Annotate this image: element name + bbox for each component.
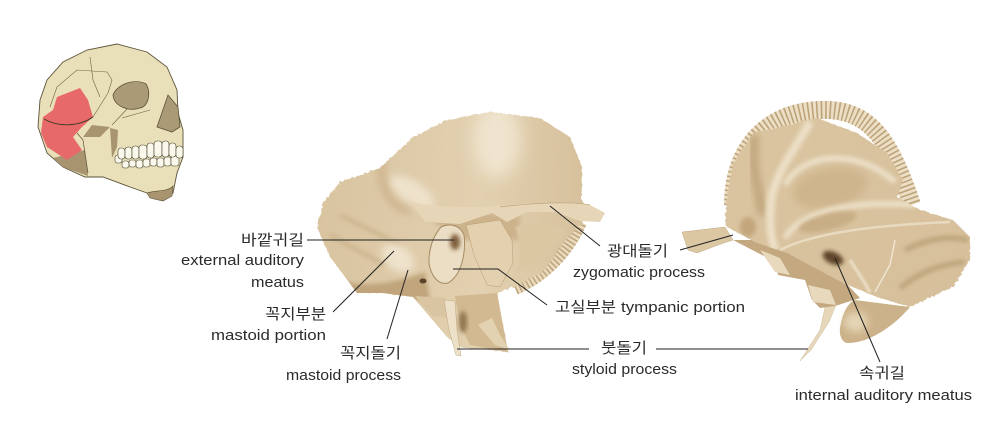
label: styloid process xyxy=(572,340,677,378)
label: styloid process: styloid process xyxy=(572,361,677,378)
skull: highlighted temporal region xyxy=(41,88,93,160)
skull: eye socket xyxy=(113,82,149,109)
label: external auditory meatus: 바깥귀길 xyxy=(241,232,304,249)
lateral bone: petrous apex xyxy=(455,293,508,352)
label: mastoid portion xyxy=(211,306,326,344)
label: internal auditory meatus: internal auditory meatus xyxy=(795,387,972,404)
label: tympanic portion xyxy=(555,299,745,316)
lateral bone: main body xyxy=(317,112,590,352)
label: tympanic portion: 고실부분 xyxy=(555,299,616,316)
label: mastoid process: 꼭지돌기 xyxy=(340,345,401,362)
skull: cheek opening xyxy=(83,125,110,137)
medial bone: styloid process xyxy=(800,303,836,361)
lateral bone: zygomatic process xyxy=(410,202,605,224)
icon: skull with temporal bone highlighted xyxy=(38,44,183,201)
illustration: lateral view of temporal bone xyxy=(317,102,605,356)
label: mastoid portion: 꼭지부분 xyxy=(265,306,326,323)
medial bone: zygomatic process xyxy=(682,227,733,253)
medial bone: mastoid bulge xyxy=(840,300,910,343)
label: external auditory meatus: meatus xyxy=(251,274,304,291)
medial bone: inner surface xyxy=(725,118,970,307)
label: zygomatic process xyxy=(573,243,705,281)
label: internal auditory meatus: 속귀길 xyxy=(859,365,905,382)
lateral bone: tympanic portion xyxy=(466,220,513,287)
lateral bone: stylomastoid foramen xyxy=(420,278,426,284)
leader lines xyxy=(307,206,880,362)
lateral bone: squamous highlight xyxy=(473,102,521,178)
medial bone: grooves and ridges xyxy=(754,135,762,215)
label: mastoid process: mastoid process xyxy=(286,367,401,384)
label: styloid process: 붓돌기 xyxy=(601,340,647,357)
label: tympanic portion: tympanic portion xyxy=(621,299,745,316)
label: external auditory meatus: external auditory xyxy=(181,252,305,269)
skull: nasal cavity xyxy=(157,95,180,132)
label: external auditory meatus xyxy=(181,232,305,291)
illustration: temporal bone anatomy xyxy=(38,44,972,403)
lateral bone: squamous lower plate xyxy=(515,223,566,272)
medial bone: petrous underside xyxy=(733,240,860,308)
medial bone: striated sutural fan xyxy=(733,110,912,205)
lateral bone: styloid process xyxy=(444,300,461,356)
lateral bone: rear striated edge xyxy=(515,222,580,288)
label: zygomatic process: zygomatic process xyxy=(573,264,705,281)
skull: teeth xyxy=(115,141,183,168)
label: mastoid portion: mastoid portion xyxy=(211,327,326,344)
illustration: medial view of temporal bone xyxy=(682,110,970,361)
label: zygomatic process: 광대돌기 xyxy=(607,243,668,260)
lateral bone: external auditory meatus xyxy=(429,225,464,283)
label: internal auditory meatus xyxy=(795,365,972,404)
medial bone: internal auditory meatus xyxy=(820,248,846,268)
label: mastoid process xyxy=(286,345,401,384)
